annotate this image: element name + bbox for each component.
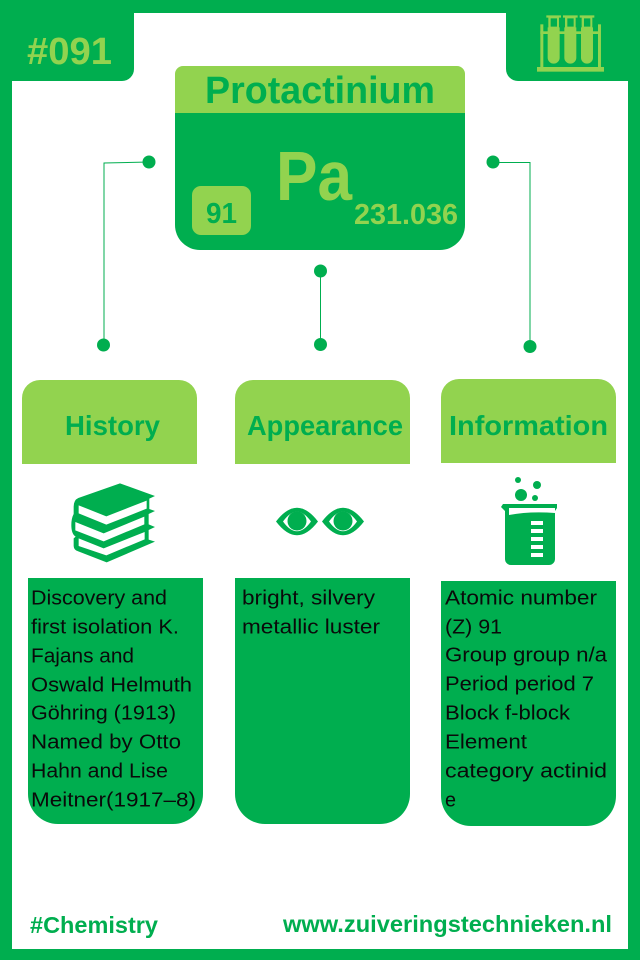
tab: element number: #091	[27, 31, 112, 73]
appearance heading	[235, 380, 410, 464]
panel: information	[441, 379, 616, 826]
information text: Atomic number	[445, 586, 597, 610]
tab: element number	[12, 13, 134, 81]
appearance text: metallic luster	[242, 616, 380, 638]
connector: information	[486, 156, 536, 353]
element symbol: Pa	[276, 137, 353, 215]
atomic number badge	[192, 186, 251, 235]
appearance text	[235, 578, 410, 824]
history text: Göhring (1913)	[31, 702, 176, 724]
atomic mass: 231.036	[354, 199, 458, 231]
history text: Oswald Helmuth	[31, 674, 192, 696]
footer hashtag: #Chemistry	[30, 912, 158, 938]
information heading	[441, 379, 616, 463]
history text: first isolation K.	[31, 616, 179, 638]
history text: Hahn and Lise	[31, 760, 168, 782]
element name: Protactinium	[205, 70, 435, 112]
history text: Named by Otto	[31, 730, 181, 754]
information text: e	[445, 788, 456, 812]
information text	[441, 581, 616, 826]
footer website: www.zuiveringstechnieken.nl	[282, 911, 612, 937]
information text: category actinid	[445, 760, 607, 782]
information text: Period period 7	[445, 672, 594, 696]
information text: Block f-block	[445, 702, 571, 724]
connector: appearance	[314, 264, 327, 351]
icon: eyes	[276, 508, 364, 535]
information text: Group group n/a	[445, 644, 608, 666]
panel: history	[22, 380, 203, 824]
icon: books	[71, 483, 155, 562]
appearance text: bright, silvery	[242, 586, 376, 610]
history heading	[22, 380, 197, 464]
information heading: Information	[449, 410, 608, 441]
appearance heading: Appearance	[247, 410, 403, 441]
history text: Fajans and	[31, 644, 134, 668]
history heading: History	[65, 410, 160, 441]
history text: Discovery and	[31, 586, 167, 610]
connector: history	[97, 156, 156, 352]
history text: Meitner(1917–8)	[31, 788, 196, 812]
element card	[175, 66, 465, 250]
information text: Element	[445, 730, 527, 754]
history text	[28, 578, 203, 824]
tab: test tubes icon	[506, 13, 628, 81]
panel: appearance	[235, 380, 410, 824]
atomic number badge: 91	[206, 198, 237, 230]
icon: beaker	[501, 477, 557, 565]
information text: (Z) 91	[445, 616, 502, 638]
